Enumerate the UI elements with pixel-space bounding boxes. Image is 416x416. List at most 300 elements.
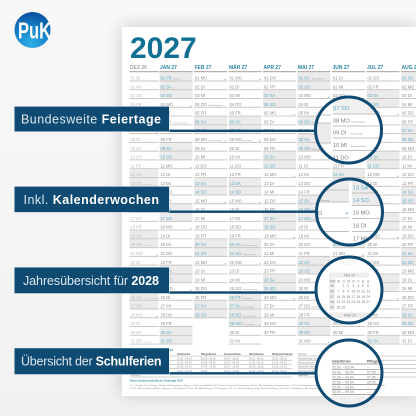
magnifier: calendar weeks: Sonntag [321,199,330,202]
column: March 2027: Frühlingsanfang [242,244,258,247]
column: May 2027: 27 DO [298,304,310,309]
magnifier: 2028 year overview: 26 [362,300,365,304]
column: March 2027: Karfreitag [242,297,252,300]
column: June 2027: 17 DO [333,216,345,221]
magnifier: 2028 year overview: 2 [347,284,349,288]
column: August 2027: 25 MI [402,286,412,291]
column: January 2027: 30 SA [160,330,172,335]
column: June 2027: 10 DO [333,154,345,160]
column: May 2027: 18 DI [298,225,308,230]
magnifier: 2028 year overview: M [337,280,340,284]
column: December 2026: 27 SO [130,304,142,309]
magnifier: public holidays [314,97,382,163]
column: March 2027: 23 DI [230,268,239,274]
magnifier: 2028 year overview: 07 [330,295,334,299]
regional holidays note: Nicht bundeseinheitliche Feiertage 2027 [130,378,184,382]
column: April 2027: 22 DO [264,260,276,265]
column: December 2026: 03 DO [130,93,142,98]
column: May 2027: 09 SO [298,146,310,151]
column: May 2027: Himmelfahrt [312,122,323,124]
column: August 2027: 17 DI [402,216,412,221]
column: February 2027: 17 MI [195,216,205,221]
school holidays table: 04.10.–16.10. [249,366,265,369]
column: July 2027: 01 DO [368,76,379,81]
column: August 2027 [401,73,416,345]
magnifier: 2028 year overview: 23 [346,300,350,304]
column: April 2027: 25 SO [264,286,276,291]
column: May 2027: 10 MO [298,154,311,160]
column: January 2027: 26 DI [160,295,170,300]
column: April 2027: 30 FR [264,330,275,335]
magnifier: school holidays: – [367,366,369,370]
column: June 2027: 21 MO [333,251,345,256]
column: February 2027 [194,76,227,318]
column: March 2027: 07 SO [230,128,241,133]
column: April 2027: 24 SA [264,277,275,282]
column: March 2027: Gründonnerstag [242,288,258,291]
magnifier: 2028 year overview: 1 [342,284,344,288]
column: December 2026: 30 MI [130,330,141,335]
column: May 2027: 20 DO [298,242,310,247]
column: May 2027: 26 MI [298,295,309,300]
column: March 2027: Ostersonntag [242,314,256,317]
column: August 2027: 05 DO [402,111,414,116]
column: May 2027: 24 MO [298,277,311,282]
column: March 2027: 26 FR [230,295,241,300]
column: August 2027: 02 MO [402,84,414,89]
magnifier: school holidays: 22.03. – 03.04. [332,380,355,384]
column: February 2027: 25 DO [195,286,207,291]
column: May 2027: 22 SA [298,260,310,265]
school holidays table: Pfingstferien [201,353,217,356]
school holidays table: 23.12.–08.01. [272,357,288,360]
column: August 2027: 29 SO [402,321,414,326]
column: June 2027: 08 DI [333,137,343,142]
column: March 2027: 10 MI [230,154,240,160]
column: June 2027 [332,76,365,336]
magnifier: public holidays: 09 DI [333,131,347,137]
magnifier: school holidays: – [367,385,369,389]
column: June 2027: 18 FR [333,225,344,230]
school holidays table: 01.07.–14.08. [224,366,240,369]
column: January 2027: 05 DI [160,111,170,116]
month headers: DEZ 26 [130,65,147,71]
column: February 2027: 20 SA [195,242,206,247]
column: July 2027: 26 MO [368,295,380,300]
magnifier: 2028 year overview: S [367,280,370,284]
school holidays table: 23.12.–02.01. [272,370,288,373]
column: June 2027: 15 DI [333,198,343,203]
column: March 2027: 27 SA [230,304,241,309]
column: June 2027: 19 SA [333,234,344,238]
column: January 2027: 10 SO [160,154,172,160]
magnifier: public holidays: Rosenmontag [351,121,365,124]
column: May 2027: 25 DI [298,286,308,291]
column: May 2027: Tag der Arbeit [312,78,325,81]
column: May 2027: 29 SA [298,321,310,326]
column: February 2027: 26 FR [195,295,206,300]
column: June 2027: 29 DI [333,321,343,326]
column: March 2027: 01 MO [230,76,242,81]
column: January 2027 [160,73,192,345]
school holidays table: 22.07.–04.09. [224,362,240,364]
magnifier: public holidays: 07 SO [333,106,350,112]
column: January 2027: Hl. Drei Könige [174,122,188,124]
column: March 2027: 11 DO [230,163,241,168]
column: December 2026: 28 MO [130,312,143,317]
column: April 2027: 09 FR [264,146,275,151]
column: August 2027: 13 FR [402,181,413,186]
column: February 2027: 27 SA [195,304,206,309]
school holidays table: 29.07.–11.09. [224,357,239,360]
column: June 2027: 05 SA [333,111,344,116]
column: March 2027: 24 MI [230,277,240,282]
column: June 2027: 09 MI [333,146,343,151]
column: August 2027: 04 MI [402,102,412,107]
column: June 2027: 03 DO [333,93,345,98]
magnifier: 2028 year overview: S [362,280,365,284]
column: July 2027: 17 SA [368,216,379,221]
column: February 2027: 22 MO [195,260,207,265]
column: April 2027: 27 DI [264,304,274,309]
column: January 2027: 01 FR [160,76,172,81]
month headers: MÄR 27 [229,64,248,71]
column: December 2026: 06 SO [130,120,142,124]
regional holidays note [130,378,385,390]
magnifier: public holidays: 11 DO [333,156,349,162]
logo: PuK [14,12,51,48]
column: August 2027: 19 DO [402,234,414,238]
column: August 2027: 12 DO [402,172,414,177]
magnifier: 2028 year overview: F [358,280,360,284]
column: December 2026: 4. Advent [144,244,153,247]
column: December 2026: 02 MI [130,84,141,89]
column: December 2026: 04 FR [130,102,142,107]
column: March 2027: 14 SO [230,190,241,195]
column: April 2027: 07 MI [264,128,274,133]
column: December 2026: 18 FR [130,225,142,230]
column: June 2027: 25 FR [333,286,344,291]
column: February 2027: 21 SO [195,251,207,256]
column: March 2027: 04 DO [230,102,241,107]
column: February 2027: Rosenmontag [208,139,222,142]
column: March 2027: 16 DI [230,207,239,212]
magnifier: 2028 year overview: 7 [337,290,339,294]
school holidays table: 22.03.–03.04. [177,362,193,364]
column: January 2027: 27 MI [160,304,171,309]
column: June 2027: 22 DI [333,260,343,265]
column: August 2027: 31 DI [402,339,412,344]
magnifier: school holidays: 30.03. – 09.04. [332,390,355,394]
column: December 2026: 31 DO [130,339,142,344]
magnifier: school holidays: 07.05. – 14.05. [367,370,390,374]
logo: PuK: PuK [18,18,51,44]
column: July 2027: 02 FR [368,84,379,89]
column: August 2027: 01 SO [402,76,414,81]
column: August 2027: 27 FR [402,304,413,309]
column: January 2027: 15 FR [160,198,172,203]
column: July 2027: 24 SA [368,277,379,282]
column: March 2027: Palmsonntag [242,253,255,256]
magnifier: 2028 year overview: 10 [352,290,355,294]
magnifier: school holidays: 22.03. – 03.04. [332,375,355,379]
column: December 2026: 14 MO [130,190,143,195]
column: March 2027: 29 MO [230,321,242,326]
month headers [130,64,416,72]
magnifier: 2028 year overview: 6 [367,284,369,288]
label: Übersicht der Schulferien: Übersicht der Schulferien [21,355,162,369]
column: January 2027: 23 SA [160,268,172,274]
column: March 2027: 15 MO [230,198,242,203]
school holidays table: 18.05.–29.05. [201,357,217,360]
magnifier: 2028 year overview [316,257,382,323]
month headers: FEB 27 [194,65,212,71]
magnifier: 2028 year overview: 18 [356,295,360,299]
column: January 2027: 12 DI [160,172,170,177]
column: April 2027: 16 FR [264,207,275,212]
column: February 2027: 12 FR [195,172,206,177]
column: July 2027: 05 MO [368,111,380,116]
column: April 2027: 14 MI [264,190,274,195]
column: May 2027: Fronleichnam [312,306,324,309]
column: May 2027: 07 FR [298,128,310,133]
column: January 2027: 24 SO [160,277,172,282]
column: August 2027: 22 SO [402,260,414,265]
school holidays table: Rheinland-Pfalz [298,370,316,373]
column: August 2027: 24 DI [402,277,412,282]
school holidays table: Sommerferien [224,353,241,356]
column: December 2026: 2. Weihnachtstag [144,297,160,300]
column: February 2027: 24 MI [195,277,205,282]
column: March 2027: 13 SA [230,181,241,186]
column: January 2027: 31 SO [160,339,172,344]
column: July 2027: 20 DI [368,242,377,247]
column: March 2027: Ostermontag [242,323,255,326]
magnifier: calendar weeks [306,178,384,245]
magnifier: calendar weeks: 10 DO [306,211,323,217]
label: Bundesweite Feiertage [14,106,169,132]
column: March 2027: Frauentag [242,139,253,142]
column: July 2027: 28 MI [368,312,378,317]
label: Inkl. Kalenderwochen: Inkl. Kalenderwochen [24,193,159,207]
school holidays table: 07.05.–14.05. [201,366,217,369]
column: August 2027: 09 MO [402,146,414,151]
column: August 2027: 16 MO [402,207,414,212]
column: January 2027: 29 FR [160,321,172,326]
column: June 2027: 13 SO [333,181,345,186]
column: May 2027: 15 SA [298,198,310,203]
column: December 2026: 22 DI [130,260,140,265]
column: April 2027: 19 MO [264,234,276,238]
magnifier: 2028 year overview: 17 [352,295,355,299]
column: May 2027: 31 MO [298,339,311,344]
column: March 2027: 09 DI [230,146,239,151]
column: April 2027: 23 FR [264,268,275,274]
column: August 2027: 18 MI [402,225,412,230]
column: March 2027: 21 SO [230,251,241,256]
column: April 2027: 17 SA [264,216,275,221]
column: July 2027: 23 FR [368,268,379,274]
column: March 2027: 25 DO [230,286,241,291]
column: August 2027: 26 DO [402,295,414,300]
column: January 2027: 08 FR [160,137,172,142]
column: April 2027: 15 DO [264,198,276,203]
column: July 2027: 09 FR [368,146,379,151]
school holidays table: Hessen [298,353,307,356]
school holidays table: 22.03.–02.04. [177,370,193,373]
column: December 2026: 01 DI [130,76,140,81]
magnifier: 2028 year overview: 06 [330,290,334,294]
column: March 2027: 02 DI [230,84,239,89]
column: December 2026: 07 MO [130,128,143,133]
magnifier: 2028 year overview: FEB 28 [344,274,355,278]
column: December 2026: 12 SA [130,172,142,177]
column: March 2027: 12 FR [230,172,241,177]
magnifier: 2028 year overview: 11 [356,290,360,294]
school holidays table: 11.10.–23.10. [249,362,264,364]
column: March 2027: 22 MO [230,260,242,265]
column: April 2027: 06 DI [264,120,274,124]
magnifier: 2028 year overview: 25 [356,300,360,304]
column: January 2027: 07 DO [160,128,172,133]
school holidays table: Osterferien [177,353,191,356]
magnifier: 2028 year overview: 14 [336,295,340,299]
column: August 2027: 28 SA [402,312,413,317]
column: March 2027: 06 SA [230,120,241,124]
column: July 2027: 29 DO [368,321,379,326]
column: March 2027: 30 DI [230,330,239,335]
column: March 2027: Karsamstag [242,306,254,309]
column: January 2027: 03 SO [160,93,172,98]
column: March 2027: 08 MO [230,137,242,142]
column: August 2027: 30 MO [402,330,414,335]
school holidays table: Saarland [298,374,309,377]
column: May 2027 [298,73,330,345]
magnifier: 2028 year overview: 24 [352,300,355,304]
column: March 2027: 17 MI [230,216,240,221]
magnifier: 2028 year overview: KW [330,280,336,284]
column: May 2027: 06 DO [298,120,310,124]
column: February 2027: 18 DO [195,225,207,230]
school holidays table: Weihnachtsferien [272,353,293,356]
column: May 2027: 21 FR [298,251,310,256]
column: April 2027: 12 MO [264,172,276,177]
column: August 2027: 21 SA [402,251,413,256]
school holidays table: 18.05.–29.05. [201,362,217,364]
column: April 2027: 29 DO [264,321,276,326]
column: January 2027: 25 MO [160,286,173,291]
magnifier: 2028 year overview: 19 [362,295,365,299]
column: May 2027: 17 MO [298,216,311,221]
column: January 2027: 20 MI [160,242,171,247]
magnifier: calendar weeks: 15 MO [353,210,370,216]
column: April 2027 [263,76,296,336]
month headers: JUN 27 [332,65,350,71]
magnifier: public holidays: Aschermittwoch [351,145,367,148]
column: June 2027: 06 SO [333,120,345,124]
column: June 2027: 27 SO [333,304,345,309]
column: April 2027: 02 FR [264,84,275,89]
column: March 2027: 31 MI [230,339,240,344]
column: January 2027: Neujahr [174,78,181,81]
column: May 2027: 03 MO [298,93,311,98]
column: May 2027: 05 MI [298,111,309,116]
column: June 2027: 12 SA [333,172,344,177]
column: February 2027: 06 SA [195,120,206,124]
magnifier: 2028 year overview: 21 [336,300,340,304]
column: July 2027: 08 DO [368,137,379,142]
column: December 2026: 23 MI [130,268,141,274]
column: March 2027: 19 FR [230,234,241,238]
column: June 2027: 20 SO [333,242,345,247]
column: August 2027: 14 SA [402,190,413,195]
column: August 2027: 10 DI [402,154,412,160]
column: January 2027: 22 FR [160,260,172,265]
column: June 2027: 04 FR [333,102,344,107]
magnifier: 2028 year overview: M [347,280,350,284]
magnifier: school holidays [314,338,384,408]
column: July 2027: 27 DI [368,304,377,309]
magnifier: school holidays: 24.03. – 03.04. [332,370,355,374]
calendar sheet [122,27,416,396]
column: July 2027: 18 SO [368,225,379,230]
magnifier: calendar weeks: 13 SA [353,186,369,192]
column: May 2027: 28 FR [298,312,310,317]
column: June 2027: 30 MI [333,330,343,335]
magnifier: 2028 year overview: 05 [330,284,334,288]
column: February 2027: 01 MO [195,76,207,81]
magnifier: 2028 year overview: 29 [342,306,345,310]
column: February 2027: 15 MO [195,198,207,203]
magnifier: 2028 year overview: 4 [358,284,360,288]
column: July 2027: 04 SO [368,102,379,107]
school holidays table: Niedersachsen [298,362,315,364]
magnifier: 2028 year overview: Jahr [340,257,358,267]
column: May 2027: 19 MI [298,234,309,238]
column: January 2027: 17 SO [160,216,172,221]
column: December 2026: 29 DI [130,321,140,326]
label: Jahresübersicht für 2028 [14,267,169,294]
column: April 2027: 08 DO [264,137,276,142]
column: July 2027: 30 FR [368,330,379,335]
magnifier: 2028 year overview: 08 [330,300,334,304]
column: July 2027: 25 SO [368,286,379,291]
column: January 2027: 06 MI [160,120,171,124]
magnifier: 2028 year overview: 13 [366,290,370,294]
column: July 2027: 15 DO [368,198,379,203]
magnifier: 2028 year overview: 5 [362,284,364,288]
column: February 2027: 09 DI [195,146,205,151]
column: August 2027: 23 MO [402,268,414,274]
column: July 2027: 21 MI [368,251,378,256]
column: January 2027: 16 SA [160,207,172,212]
column: April 2027: 11 SO [264,163,275,168]
column: August 2027: 15 SO [402,198,414,203]
column: February 2027: 10 MI [195,154,205,160]
column: April 2027: 21 MI [264,251,274,256]
column: July 2027: 31 SA [368,339,379,344]
column: July 2027: 12 MO [368,172,380,177]
magnifier: 2028 year overview: 20 [366,295,370,299]
column: January 2027: 14 DO [160,190,172,195]
title: 2027: 2027 [130,32,197,65]
magnifier: 2028 year overview: 12 [362,290,365,294]
column: August 2027: 03 DI [402,93,412,98]
column: May 2027: 23 SO [298,268,310,274]
column: January 2027: 11 MO [160,163,172,168]
school holidays table: Nordrhein-Westfalen [298,366,321,369]
magnifier: calendar weeks: 17 MI [353,236,367,242]
